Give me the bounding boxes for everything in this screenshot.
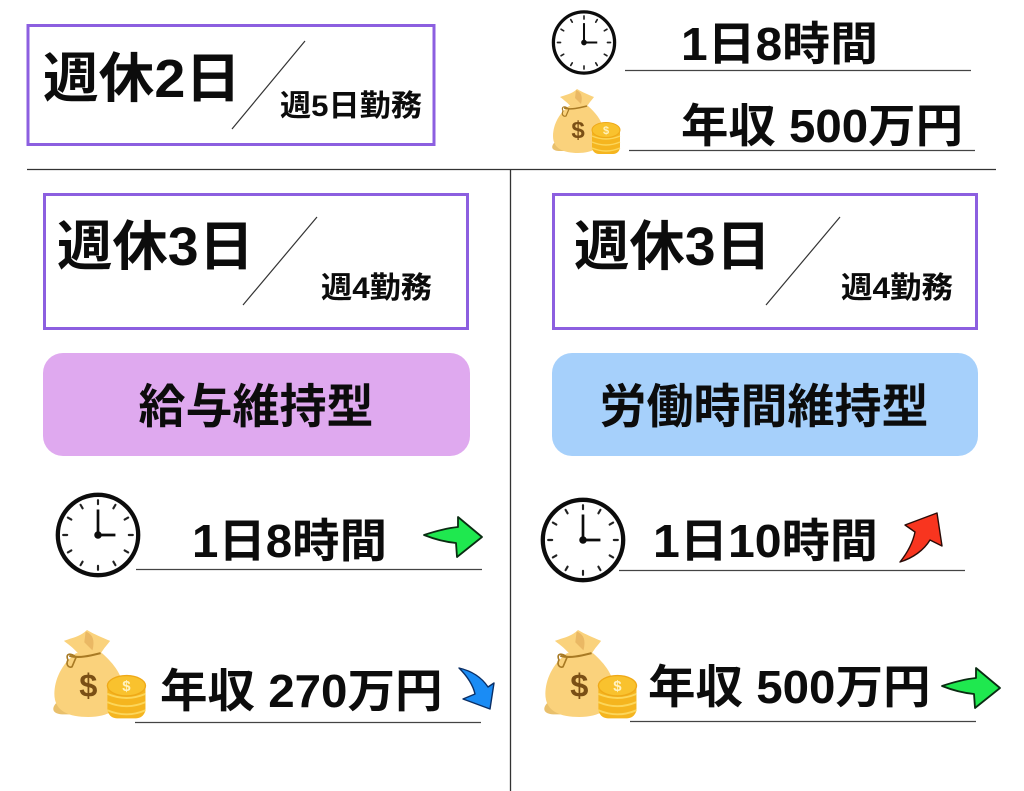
badge: 給与維持型 — [43, 353, 470, 456]
panel: left schedule 週休3日 — [44, 194, 468, 328]
divider lines — [27, 170, 996, 791]
text: 年収 500万円: 年収 500万円 — [648, 661, 930, 713]
heading: 週休2日: 週休2日 — [43, 49, 241, 109]
left salary row — [53, 630, 494, 722]
panel: right schedule 週休3日 — [554, 194, 976, 328]
label: 週5日勤務: 週5日勤務 — [280, 90, 422, 123]
icon: clock — [58, 495, 138, 575]
text: 年収 500万円: 年収 500万円 — [681, 100, 963, 152]
left hours row — [58, 495, 482, 575]
icon: clock — [543, 500, 623, 580]
badge: 労働時間維持型: 労働時間維持型 — [600, 380, 928, 433]
right hours row — [543, 500, 965, 580]
heading: 週休3日: 週休3日 — [574, 217, 771, 277]
icon: clock — [553, 12, 615, 73]
arrow: red up — [900, 513, 942, 562]
icon: money bag — [544, 630, 636, 718]
text: 1日8時間: 1日8時間 — [681, 18, 878, 70]
icon: money bag — [552, 89, 620, 154]
label: 週4勤務: 週4勤務 — [321, 272, 432, 305]
label: 週4勤務: 週4勤務 — [841, 272, 953, 305]
text: 年収 270万円: 年収 270万円 — [160, 665, 442, 717]
panel: current schedule 週休2日 — [28, 26, 434, 144]
right salary row — [544, 630, 1000, 722]
current salary row — [552, 89, 975, 154]
text: 1日8時間: 1日8時間 — [192, 515, 387, 567]
text: 1日10時間: 1日10時間 — [653, 515, 878, 567]
arrow: green flat — [424, 517, 482, 557]
badge: 給与維持型: 給与維持型 — [138, 380, 374, 433]
heading: 週休3日: 週休3日 — [57, 217, 254, 277]
current hours row — [553, 12, 971, 73]
arrow: green flat — [942, 668, 1000, 708]
arrow: blue down — [459, 668, 494, 709]
badge: 労働時間維持型 — [552, 353, 978, 456]
icon: money bag — [53, 630, 145, 718]
